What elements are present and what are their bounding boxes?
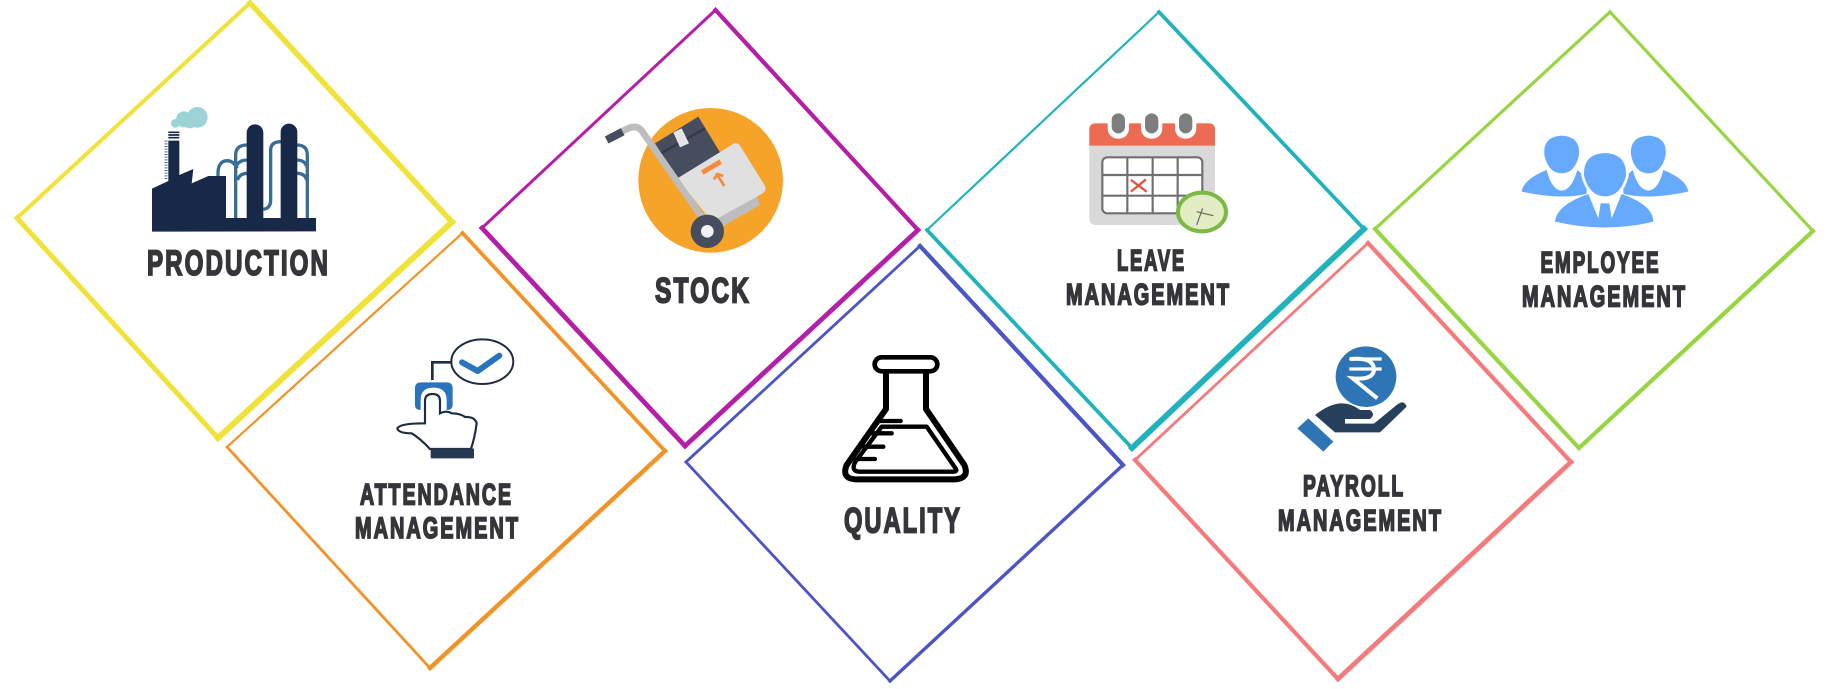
- icon: factory: [152, 107, 316, 232]
- panel: attendance management: [227, 233, 665, 668]
- label: LEAVE: [1117, 244, 1186, 278]
- panel: stock: [482, 10, 918, 446]
- label: STOCK: [655, 270, 751, 310]
- icon: flask: [845, 357, 966, 479]
- diamond outline: blue: [686, 246, 1123, 681]
- label: ATTENDANCE: [360, 478, 513, 512]
- diamond outline: pink: [1135, 243, 1571, 679]
- panel: quality: [686, 246, 1123, 681]
- diamond outline: orange: [227, 233, 665, 668]
- label line 2: MANAGEMENT: [1278, 504, 1443, 538]
- label: QUALITY: [844, 500, 962, 540]
- label line 2: MANAGEMENT: [1066, 278, 1231, 312]
- panel: leave management: [927, 12, 1364, 448]
- diamond outline: yellow: [17, 3, 452, 438]
- label: PRODUCTION: [147, 243, 330, 283]
- icon: calendar with clock: [1089, 113, 1226, 231]
- label: PAYROLL: [1303, 470, 1405, 503]
- icon: hand truck: [607, 108, 783, 253]
- icon: three people: [1522, 136, 1688, 227]
- panel: payroll management: [1135, 243, 1571, 679]
- icon: fingerprint touch: [397, 339, 513, 458]
- label: EMPLOYEE: [1540, 246, 1660, 280]
- icon: rupee in hand: [1297, 346, 1407, 452]
- diamond outline: teal: [927, 12, 1364, 448]
- diamond outline: green: [1375, 12, 1813, 448]
- label line 2: MANAGEMENT: [355, 512, 520, 545]
- diamond outline: purple: [482, 10, 918, 446]
- panel: employee management: [1375, 12, 1813, 448]
- label line 2: MANAGEMENT: [1522, 280, 1687, 314]
- panel: production: [17, 3, 452, 438]
